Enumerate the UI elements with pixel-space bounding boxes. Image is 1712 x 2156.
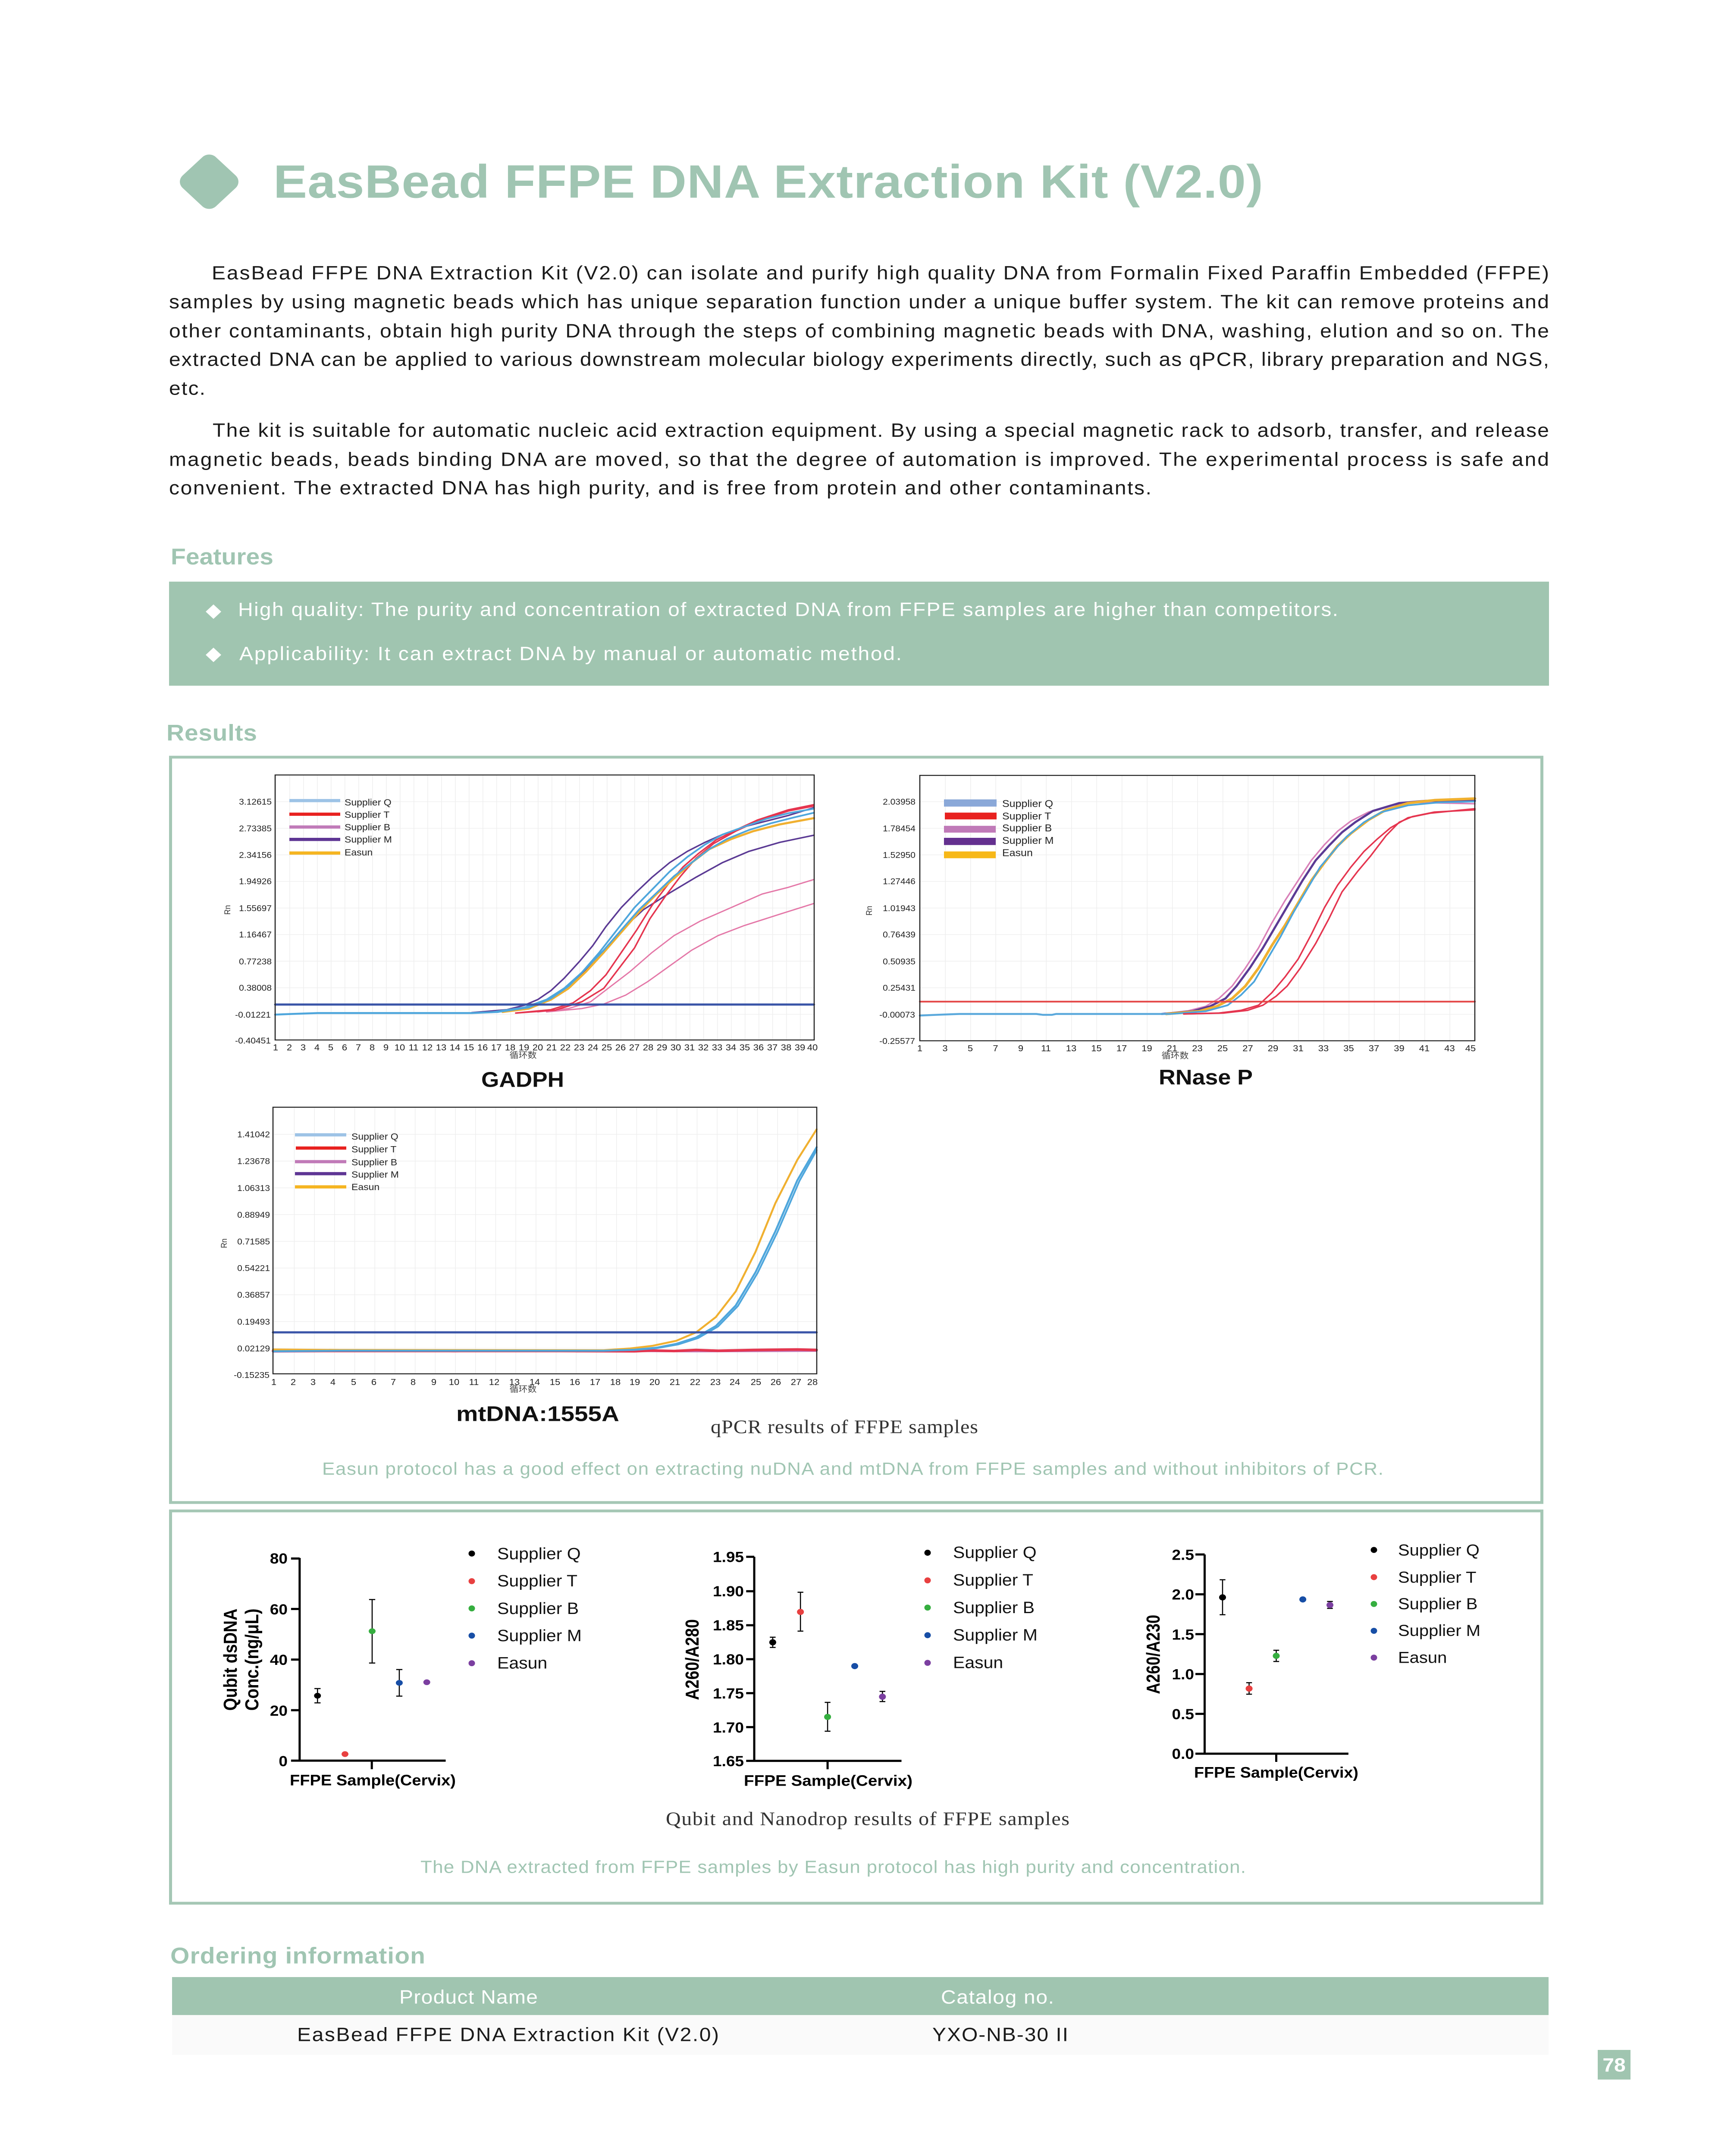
text block: intro paragraph one	[169, 262, 1549, 399]
chart: mtDNA 1555A amplification curves: 27	[791, 1378, 801, 1387]
chart: GADPH amplification curves: 40	[807, 1043, 818, 1053]
chart: GADPH amplification curves: 2.34156	[239, 851, 272, 860]
callout: purity conclusion: The DNA extracted from FFPE samples by Easun protocol has high purity and concentration.	[420, 1857, 1246, 1877]
legend: mtDNA 1555A: Supplier B	[351, 1157, 397, 1167]
chart: RNase P amplification curves: 2.03958	[883, 798, 916, 807]
legend: mtDNA 1555A	[295, 1131, 399, 1192]
chart: A260/A280: 1.95	[713, 1549, 744, 1565]
chart: GADPH amplification curves: 2.73385	[239, 824, 272, 834]
chart: A260/A230: 2.5	[1172, 1547, 1194, 1563]
chart: GADPH amplification curves: 13	[436, 1043, 446, 1053]
chart: mtDNA 1555A amplification curves: 0.19493	[237, 1317, 270, 1327]
chart: RNase P amplification curves: 35	[1343, 1044, 1354, 1053]
chart: RNase P amplification curves: 41	[1419, 1044, 1430, 1053]
chart: mtDNA 1555A amplification curves: 26	[771, 1378, 781, 1387]
chart: Qubit concentration: 80	[270, 1550, 288, 1567]
chart: GADPH amplification curves: 29	[657, 1043, 667, 1053]
chart: mtDNA 1555A amplification curves: 16	[570, 1378, 580, 1387]
feature: high quality: High quality: The purity and concentration of extracted DNA from FFPE samples are higher than competitors.	[238, 599, 1338, 620]
legend: RNase P: Supplier M	[1002, 835, 1054, 846]
chart: GADPH amplification curves: -0.01221	[235, 1010, 271, 1020]
text block: intro paragraph two: convenient. The extracted DNA has high purity, and is free from protein and other contaminants.	[169, 477, 1151, 498]
chart: mtDNA 1555A amplification curves: 6	[371, 1378, 376, 1387]
chart: A260/A230: 1.5	[1172, 1626, 1194, 1643]
chart: mtDNA 1555A amplification curves: 4	[330, 1378, 336, 1387]
chart: A260/A280: 1.70	[713, 1719, 744, 1736]
chart: A260/A280: 1.65	[713, 1753, 744, 1770]
chart: Qubit concentration: 20	[270, 1702, 288, 1719]
chart: mtDNA 1555A amplification curves	[219, 1107, 818, 1394]
legend: mtDNA 1555A: Supplier T	[351, 1144, 397, 1154]
chart: RNase P amplification curves: 15	[1091, 1044, 1102, 1053]
chart: GADPH amplification curves: 5	[328, 1043, 333, 1053]
chart: mtDNA 1555A amplification curves: 0.02129	[237, 1344, 270, 1354]
chart: RNase P amplification curves: 3	[942, 1044, 948, 1053]
heading: Features: Features	[171, 544, 273, 569]
page number	[1598, 2050, 1630, 2080]
chart: mtDNA 1555A amplification curves: 23	[710, 1378, 721, 1387]
chart: A260/A280: 1.85	[713, 1617, 744, 1634]
chart: RNase P amplification curves: 7	[993, 1044, 998, 1053]
chart: mtDNA 1555A amplification curves: 25	[751, 1378, 761, 1387]
legend: Qubit: Supplier M	[497, 1626, 582, 1645]
legend: Qubit: Supplier Q	[497, 1545, 581, 1563]
chart: mtDNA 1555A amplification curves: 21	[670, 1378, 680, 1387]
chart title: RNase P: RNase P	[1159, 1065, 1253, 1089]
chart: mtDNA 1555A amplification curves: 10	[449, 1378, 459, 1387]
table cell: catalog number: YXO-NB-30 II	[932, 2024, 1068, 2045]
legend: A260/A280: Supplier Q	[953, 1543, 1037, 1562]
text block: intro paragraph one: etc.	[169, 377, 205, 399]
chart: RNase P amplification curves: 0.76439	[883, 931, 916, 940]
legend: A260/A230: Supplier B	[1398, 1595, 1477, 1613]
chart: GADPH amplification curves: Rn	[223, 905, 232, 915]
chart: RNase P amplification curves: 1.78454	[883, 824, 916, 834]
chart: A260/A280	[682, 1543, 1038, 1789]
chart: GADPH amplification curves: 4	[314, 1043, 320, 1053]
chart: mtDNA 1555A amplification curves: 19	[630, 1378, 640, 1387]
chart: GADPH amplification curves: 31	[684, 1043, 695, 1053]
legend: GADPH: Supplier Q	[345, 797, 392, 808]
chart: GADPH amplification curves: 1	[273, 1043, 278, 1053]
chart: A260/A280: FFPE Sample(Cervix)	[744, 1772, 912, 1789]
chart: mtDNA 1555A amplification curves: 1.06313	[237, 1184, 270, 1193]
legend: GADPH: Supplier B	[345, 822, 390, 832]
legend: Qubit: Easun	[497, 1654, 547, 1672]
text block: intro paragraph two: The kit is suitable for automatic nucleic acid extraction equipment. By using a special magnetic rack to adsorb, transfer, and release	[213, 419, 1549, 441]
chart: GADPH amplification curves: 33	[712, 1043, 722, 1053]
chart: A260/A230: FFPE Sample(Cervix)	[1194, 1764, 1358, 1781]
legend: RNase P	[944, 798, 1054, 859]
chart: GADPH amplification curves: 15	[464, 1043, 474, 1053]
caption: qPCR results: qPCR results of FFPE samples	[711, 1416, 978, 1438]
text block: intro paragraph two	[169, 419, 1549, 498]
chart: mtDNA 1555A amplification curves: 1.41042	[237, 1130, 270, 1139]
chart: GADPH amplification curves: 10	[395, 1043, 405, 1053]
chart: GADPH amplification curves: 9	[383, 1043, 389, 1053]
legend: mtDNA 1555A: Supplier M	[351, 1169, 399, 1180]
chart: GADPH amplification curves: 8	[370, 1043, 375, 1053]
callout: qPCR conclusion: Easun protocol has a good effect on extracting nuDNA and mtDNA from FFPE samples and without inhibitors of PCR.	[322, 1459, 1383, 1479]
chart: Qubit concentration: FFPE Sample(Cervix)	[290, 1772, 456, 1789]
chart: mtDNA 1555A amplification curves: 18	[610, 1378, 621, 1387]
heading: Results: Results	[166, 720, 257, 746]
chart: RNase P amplification curves: 31	[1293, 1044, 1304, 1053]
chart: mtDNA 1555A amplification curves: 13	[509, 1378, 520, 1387]
chart: mtDNA 1555A amplification curves: 8	[411, 1378, 416, 1387]
chart: A260/A280: 1.75	[713, 1685, 744, 1702]
chart: RNase P amplification curves: Rn	[864, 906, 874, 915]
chart: mtDNA 1555A amplification curves: 20	[649, 1378, 660, 1387]
chart: mtDNA 1555A amplification curves: 7	[391, 1378, 396, 1387]
text block: intro paragraph one: EasBead FFPE DNA Extraction Kit (V2.0) can isolate and purify high quality DNA from Formalin Fixed Paraffin Embedded (FFPE)	[212, 262, 1549, 284]
chart: GADPH amplification curves: 35	[740, 1043, 750, 1053]
legend: Qubit: Supplier B	[497, 1599, 579, 1618]
chart: GADPH amplification curves: 3.12615	[239, 798, 272, 807]
chart: RNase P amplification curves: 19	[1141, 1044, 1152, 1053]
chart: Qubit concentration: Qubit dsDNA	[220, 1609, 241, 1711]
chart: GADPH amplification curves: 16	[477, 1043, 488, 1053]
legend: A260/A280: Supplier B	[953, 1599, 1035, 1617]
chart: GADPH amplification curves: 23	[574, 1043, 584, 1053]
chart: RNase P amplification curves: 1.27446	[883, 877, 916, 886]
chart: GADPH amplification curves: 14	[450, 1043, 460, 1053]
chart: GADPH amplification curves	[223, 775, 818, 1060]
chart: GADPH amplification curves: 34	[726, 1043, 736, 1053]
text block: intro paragraph one: extracted DNA can be applied to various downstream molecular biology experiments directly, such as qPCR, library preparation and NGS,	[169, 348, 1549, 370]
chart: mtDNA 1555A amplification curves: -0.15235	[234, 1371, 270, 1380]
chart: GADPH amplification curves: 7	[356, 1043, 361, 1053]
panel: qPCR results	[171, 757, 1542, 1502]
legend: A260/A230: Supplier Q	[1398, 1542, 1480, 1559]
chart: GADPH amplification curves: 1.16467	[239, 931, 272, 940]
chart: RNase P amplification curves: -0.00073	[879, 1010, 915, 1020]
chart: RNase P amplification curves: 29	[1268, 1044, 1278, 1053]
chart: RNase P amplification curves: 43	[1444, 1044, 1455, 1053]
chart: RNase P amplification curves: 0.25431	[883, 984, 916, 993]
chart: GADPH amplification curves: 循环数	[510, 1050, 536, 1060]
legend: A260/A280	[925, 1543, 1038, 1672]
chart: GADPH amplification curves: 19	[519, 1043, 529, 1053]
chart: RNase P amplification curves: 45	[1465, 1044, 1476, 1053]
text block: intro paragraph one: samples by using magnetic beads which has unique separation function under a unique buffer system. The kit can remove proteins and	[169, 291, 1549, 312]
legend: A260/A280: Supplier M	[953, 1626, 1038, 1644]
chart: GADPH amplification curves: 0.77238	[239, 957, 272, 966]
chart: GADPH amplification curves: 11	[409, 1043, 418, 1053]
chart: mtDNA 1555A amplification curves: 1.23678	[237, 1157, 270, 1166]
chart: Qubit concentration: 0	[279, 1753, 288, 1770]
chart: mtDNA 1555A amplification curves: 24	[730, 1378, 740, 1387]
icon: rounded diamond	[176, 151, 242, 213]
chart: GADPH amplification curves: 24	[588, 1043, 598, 1053]
chart: mtDNA 1555A amplification curves: 17	[590, 1378, 600, 1387]
chart: mtDNA 1555A amplification curves: 28	[807, 1378, 818, 1387]
chart: mtDNA 1555A amplification curves: 15	[550, 1378, 560, 1387]
chart: RNase P amplification curves: 39	[1394, 1044, 1405, 1053]
table header: catalog number: Catalog no.	[941, 1986, 1054, 2008]
chart: A260/A230: 1.0	[1172, 1666, 1194, 1683]
chart: RNase P amplification curves: 25	[1217, 1044, 1228, 1053]
chart: GADPH amplification curves: -0.40451	[235, 1037, 271, 1046]
legend: RNase P: Supplier Q	[1002, 798, 1053, 809]
chart: GADPH amplification curves: 20	[533, 1043, 543, 1053]
chart: A260/A280: A260/A280	[682, 1619, 702, 1700]
chart: GADPH amplification curves: 22	[560, 1043, 571, 1053]
chart: RNase P amplification curves: 23	[1192, 1044, 1203, 1053]
chart: Qubit concentration	[220, 1545, 582, 1789]
legend: A260/A230: Supplier T	[1398, 1569, 1477, 1586]
legend: mtDNA 1555A: Supplier Q	[351, 1131, 398, 1142]
legend: Qubit: Supplier T	[497, 1572, 577, 1590]
chart: Qubit concentration: Conc.(ng/μL)	[241, 1609, 262, 1711]
legend: RNase P: Supplier T	[1002, 811, 1051, 822]
legend: A260/A280: Easun	[953, 1654, 1003, 1672]
chart: GADPH amplification curves: 12	[422, 1043, 433, 1053]
chart: mtDNA 1555A amplification curves: 1	[271, 1378, 276, 1387]
table: ordering information	[172, 1977, 1549, 2055]
chart: mtDNA 1555A amplification curves: 0.71585	[237, 1238, 270, 1247]
chart: GADPH amplification curves: 21	[546, 1043, 557, 1053]
chart: A260/A230: 0.5	[1172, 1706, 1194, 1723]
chart: A260/A280: 1.80	[713, 1651, 744, 1668]
chart: RNase P amplification curves: 循环数	[1162, 1051, 1188, 1060]
chart: RNase P amplification curves: 1	[917, 1044, 922, 1053]
panel: Qubit and Nanodrop results	[171, 1511, 1542, 1903]
chart: GADPH amplification curves: 18	[505, 1043, 515, 1053]
chart: GADPH amplification curves: 28	[643, 1043, 653, 1053]
chart: mtDNA 1555A amplification curves: 循环数	[510, 1384, 536, 1394]
legend: mtDNA 1555A: Easun	[351, 1182, 379, 1192]
chart: A260/A230: 2.0	[1172, 1586, 1194, 1603]
chart: RNase P amplification curves: 9	[1018, 1044, 1023, 1053]
title: EasBead FFPE DNA Extraction Kit (V2.0)	[273, 155, 1263, 208]
legend: A260/A230: Supplier M	[1398, 1622, 1480, 1640]
chart: A260/A280: 1.90	[713, 1583, 744, 1600]
legend: GADPH	[289, 797, 392, 858]
icon: bullet diamond	[206, 605, 221, 619]
caption: Qubit and Nanodrop results: Qubit and Nanodrop results of FFPE samples	[666, 1808, 1069, 1830]
chart: mtDNA 1555A amplification curves: 22	[690, 1378, 700, 1387]
chart: GADPH amplification curves: 30	[671, 1043, 681, 1053]
chart title: GADPH: GADPH	[481, 1068, 564, 1091]
chart: GADPH amplification curves: 36	[753, 1043, 764, 1053]
chart: GADPH amplification curves: 32	[698, 1043, 709, 1053]
chart: A260/A230: A260/A230	[1143, 1615, 1163, 1694]
chart: RNase P amplification curves: 21	[1167, 1044, 1177, 1053]
chart: RNase P amplification curves: 37	[1369, 1044, 1379, 1053]
legend: A260/A280: Supplier T	[953, 1571, 1033, 1589]
chart: GADPH amplification curves: 38	[781, 1043, 791, 1053]
chart: RNase P amplification curves: 27	[1242, 1044, 1253, 1053]
chart: RNase P amplification curves	[864, 775, 1476, 1060]
chart: Qubit concentration: 60	[270, 1601, 288, 1618]
legend: GADPH: Easun	[345, 847, 373, 858]
chart: GADPH amplification curves: 39	[795, 1043, 805, 1053]
chart: GADPH amplification curves: 1.94926	[239, 877, 272, 886]
legend: A260/A230	[1370, 1542, 1480, 1667]
chart: RNase P amplification curves: 1.52950	[883, 851, 916, 860]
text block: intro paragraph two: magnetic beads, beads binding DNA are moved, so that the degree of automation is improved. The experimental process is safe and	[169, 448, 1549, 470]
legend: Qubit	[468, 1545, 582, 1672]
chart: mtDNA 1555A amplification curves: Rn	[219, 1238, 229, 1248]
chart: mtDNA 1555A amplification curves: 0.54221	[237, 1264, 270, 1273]
legend: GADPH: Supplier M	[345, 834, 392, 845]
chart: GADPH amplification curves: 2	[287, 1043, 292, 1053]
chart: RNase P amplification curves: 33	[1318, 1044, 1329, 1053]
chart title: mtDNA 1555A: mtDNA:1555A	[456, 1402, 619, 1426]
chart: A260/A230	[1143, 1542, 1480, 1781]
legend: A260/A230: Easun	[1398, 1649, 1447, 1667]
chart: RNase P amplification curves: -0.25577	[879, 1037, 915, 1046]
icon: bullet diamond	[206, 648, 221, 662]
chart: mtDNA 1555A amplification curves: 3	[310, 1378, 316, 1387]
table header: product name: Product Name	[399, 1986, 538, 2008]
chart: RNase P amplification curves: 13	[1066, 1044, 1076, 1053]
chart: RNase P amplification curves: 17	[1116, 1044, 1127, 1053]
chart: GADPH amplification curves: 37	[767, 1043, 778, 1053]
chart: mtDNA 1555A amplification curves: 0.36857	[237, 1291, 270, 1300]
chart: GADPH amplification curves: 6	[342, 1043, 347, 1053]
chart: RNase P amplification curves: 5	[968, 1044, 973, 1053]
page number: 78	[1602, 2054, 1626, 2076]
table cell: product: EasBead FFPE DNA Extraction Kit (V2.0)	[297, 2024, 719, 2045]
chart: RNase P amplification curves: 0.50935	[883, 957, 916, 966]
chart: GADPH amplification curves: 0.38008	[239, 984, 272, 993]
chart: mtDNA 1555A amplification curves: 0.88949	[237, 1211, 270, 1220]
chart: mtDNA 1555A amplification curves: 14	[530, 1378, 540, 1387]
chart: GADPH amplification curves: 27	[629, 1043, 640, 1053]
chart: mtDNA 1555A amplification curves: 11	[469, 1378, 479, 1387]
legend: GADPH: Supplier T	[345, 809, 390, 820]
chart: GADPH amplification curves: 26	[615, 1043, 626, 1053]
chart: GADPH amplification curves: 17	[491, 1043, 502, 1053]
text block: intro paragraph one: other contaminants, obtain high purity DNA through the steps of combining magnetic beads with DNA, washing, elution and so on. The	[169, 320, 1549, 342]
heading: Ordering information: Ordering information	[170, 1943, 425, 1968]
chart: mtDNA 1555A amplification curves: 12	[489, 1378, 499, 1387]
panel: features banner	[169, 582, 1549, 686]
chart: GADPH amplification curves: 1.55697	[239, 904, 272, 913]
chart: RNase P amplification curves: 1.01943	[883, 904, 916, 913]
chart: GADPH amplification curves: 25	[602, 1043, 612, 1053]
chart: A260/A230: 0.0	[1172, 1745, 1194, 1762]
chart: GADPH amplification curves: 3	[301, 1043, 306, 1053]
legend: RNase P: Easun	[1002, 847, 1033, 859]
legend: RNase P: Supplier B	[1002, 823, 1052, 834]
chart: mtDNA 1555A amplification curves: 2	[291, 1378, 296, 1387]
chart: RNase P amplification curves: 11	[1041, 1044, 1051, 1053]
chart: mtDNA 1555A amplification curves: 9	[431, 1378, 436, 1387]
chart: mtDNA 1555A amplification curves: 5	[351, 1378, 356, 1387]
feature: applicability: Applicability: It can extract DNA by manual or automatic method.	[239, 642, 902, 664]
chart: Qubit concentration: 40	[270, 1651, 288, 1668]
